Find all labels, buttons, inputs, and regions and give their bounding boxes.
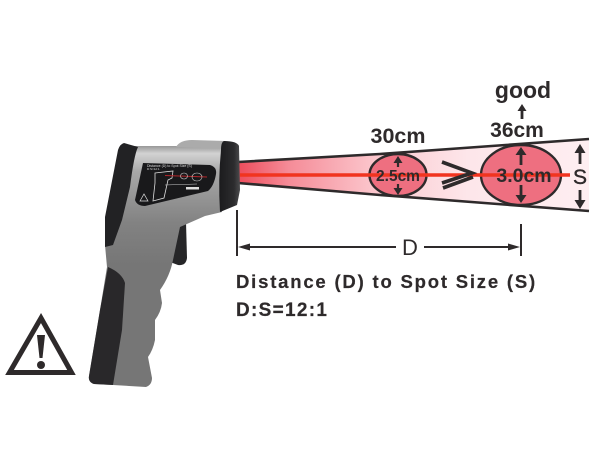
label: 2.5cm: 2.5cm <box>376 168 420 185</box>
label: D: D <box>402 235 418 260</box>
label plate <box>135 163 216 206</box>
rear black cap <box>105 143 138 247</box>
ratio text: D:S=12:1 <box>236 300 328 321</box>
label plate: Distance (D) to Spot Size (S) <box>147 164 192 168</box>
heading: distance to spot size: Distance (D) to Spot Size (S) <box>236 271 537 292</box>
label: 3.0cm: 3.0cm <box>496 165 552 187</box>
spot ellipse 36cm <box>481 145 561 205</box>
trigger <box>170 222 187 265</box>
spot arrows large <box>516 147 526 203</box>
S dimension arrows <box>574 144 586 209</box>
spot ellipse 30cm <box>370 154 426 196</box>
raised top section <box>176 140 226 149</box>
greater-or-equal symbol <box>442 162 473 188</box>
icon: warning triangle <box>10 318 72 372</box>
grip black back panel <box>89 267 125 385</box>
laser beam cone <box>238 139 589 211</box>
head and grip gray body <box>89 146 224 387</box>
label: good: good <box>495 77 551 103</box>
label: 30cm: 30cm <box>370 124 426 148</box>
thermometer gun <box>89 140 240 387</box>
label: 36cm: 36cm <box>490 119 544 142</box>
spot arrows small <box>394 156 402 195</box>
red laser line <box>240 173 570 177</box>
distance dimension line <box>237 210 521 256</box>
label: S: S <box>573 166 587 189</box>
label plate: D:S=12:1 <box>147 167 160 171</box>
front black cap <box>219 141 240 212</box>
arrow to good <box>518 104 526 119</box>
